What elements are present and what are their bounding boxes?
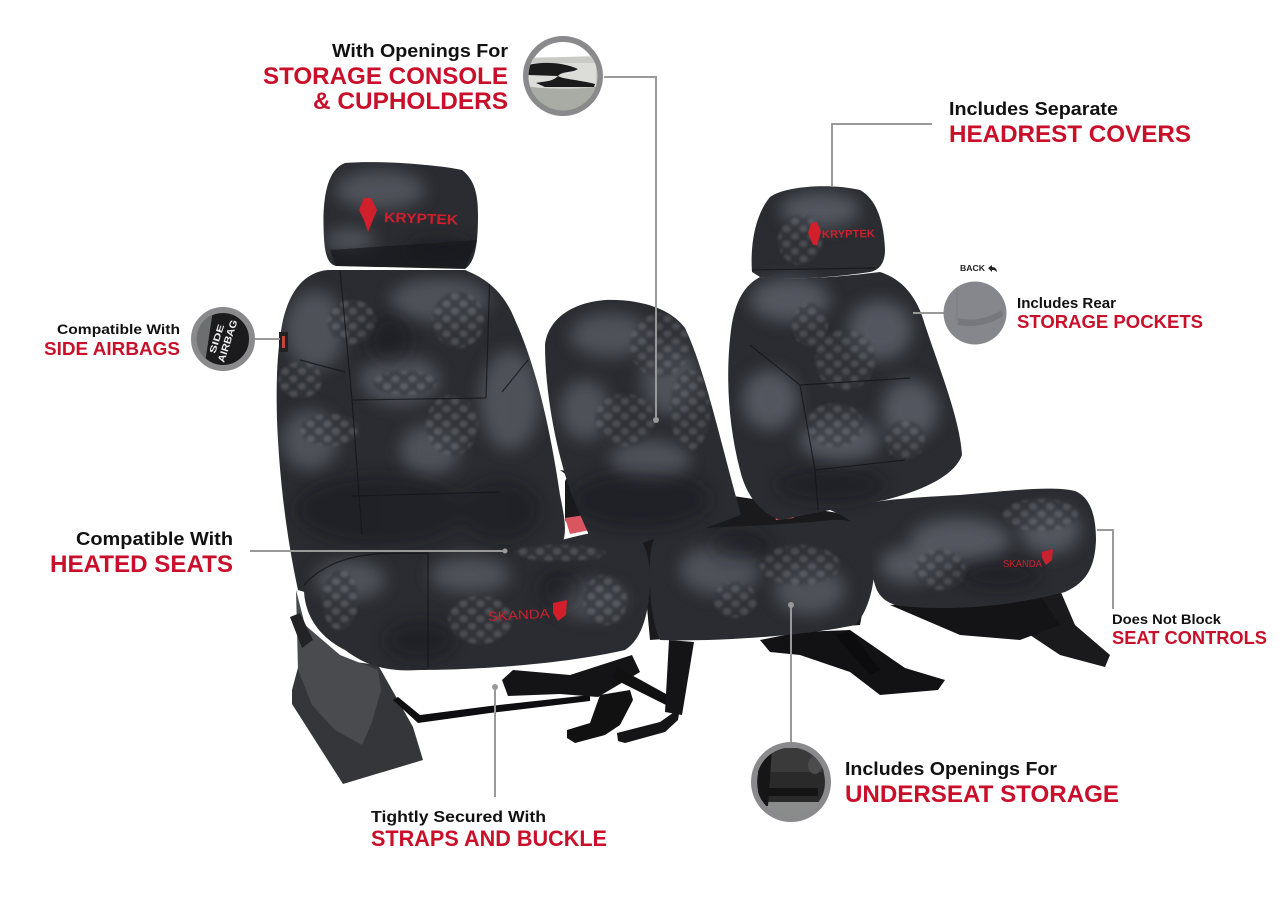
- logo: Kryptek left headrest: KRYPTEK: [384, 209, 458, 228]
- icon: rear storage pocket detail: [944, 282, 1006, 344]
- camouflage left seat: [278, 170, 627, 668]
- icon: underseat storage detail: [754, 745, 828, 819]
- seat base and rails: [290, 470, 1110, 784]
- label: straps and buckle: [371, 809, 607, 851]
- label: straps and buckle: STRAPS AND BUCKLE: [371, 826, 607, 851]
- side airbag tag: [279, 332, 288, 352]
- label: storage console: With Openings For: [332, 41, 508, 61]
- leader: underseat storage: [788, 602, 794, 745]
- label: back indicator: BACK: [960, 264, 985, 273]
- camouflage middle seat: [560, 313, 845, 618]
- label: rear storage pockets: [1017, 295, 1203, 332]
- label: heated seats: HEATED SEATS: [50, 551, 233, 578]
- label: headrest covers: HEADREST COVERS: [949, 121, 1191, 148]
- label: heated seats: [50, 529, 233, 578]
- logo: Skanda right cushion: [1003, 549, 1053, 570]
- leader: straps: [492, 684, 498, 797]
- icon: side airbag detail: AIRBAG: [216, 318, 241, 364]
- label: seat controls: [1112, 611, 1267, 648]
- leader: headrest: [832, 124, 932, 186]
- leader: heated seats: [250, 548, 508, 554]
- leader: rear pocket: [913, 312, 946, 314]
- logo: Kryptek right headrest: [808, 222, 875, 245]
- logo: Skanda left cushion: [487, 600, 567, 624]
- logo: Kryptek right headrest: KRYPTEK: [822, 228, 875, 241]
- label: underseat storage: [845, 759, 1119, 808]
- label: seat controls: Does Not Block: [1112, 611, 1221, 627]
- label: underseat storage: UNDERSEAT STORAGE: [845, 781, 1119, 808]
- label: headrest covers: [949, 99, 1191, 148]
- label: storage console: STORAGE CONSOLE: [263, 63, 508, 90]
- label: side airbags: Compatible With: [57, 321, 180, 337]
- seat product photo: [277, 162, 1110, 784]
- leader: storage console: [604, 77, 659, 423]
- leader: seat controls: [1097, 530, 1113, 609]
- label: storage console: [263, 41, 508, 115]
- label: rear storage pockets: STORAGE POCKETS: [1017, 312, 1203, 332]
- icon: storage console detail: [525, 39, 600, 115]
- label: seat controls: SEAT CONTROLS: [1112, 628, 1267, 648]
- label: side airbags: SIDE AIRBAGS: [44, 339, 180, 359]
- label: back indicator: [960, 264, 997, 273]
- seat silhouettes: [277, 162, 1096, 670]
- icon: side airbag detail: [194, 310, 252, 370]
- camouflage right seat: [742, 192, 1080, 590]
- label: underseat storage: Includes Openings For: [845, 759, 1057, 779]
- label: side airbags: [44, 321, 180, 359]
- logo: Skanda left cushion: SKANDA: [487, 606, 550, 624]
- label: straps and buckle: Tightly Secured With: [371, 809, 546, 826]
- label: rear storage pockets: Includes Rear: [1017, 295, 1116, 312]
- label: heated seats: Compatible With: [76, 529, 233, 549]
- label: headrest covers: Includes Separate: [949, 99, 1118, 119]
- icon: side airbag detail: SIDE: [207, 323, 226, 355]
- leader: side airbag: [254, 338, 280, 340]
- logo: Kryptek left headrest: [359, 198, 458, 232]
- label: storage console: & CUPHOLDERS: [313, 88, 508, 115]
- logo: Skanda right cushion: SKANDA: [1003, 559, 1042, 570]
